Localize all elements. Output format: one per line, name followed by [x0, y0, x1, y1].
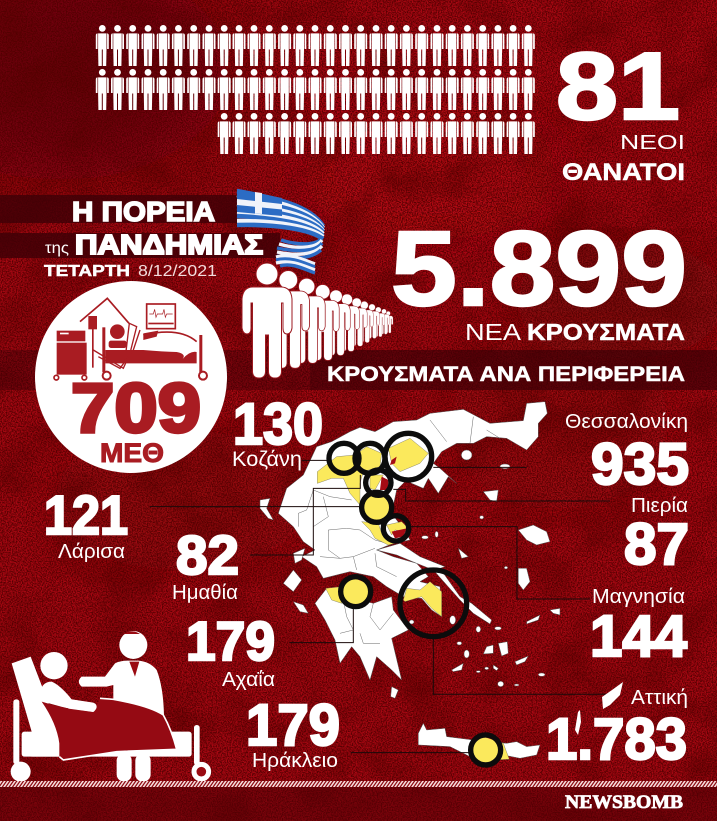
- figure: Thessaloniki: 935: [591, 432, 689, 497]
- regional borders: [298, 417, 500, 643]
- figure: Attica: Αττική: [631, 687, 688, 709]
- figure: Magnisia: Μαγνησία: [592, 586, 685, 608]
- 709 ICU number: 709: [71, 369, 201, 447]
- figure: Thessaloniki: Θεσσαλονίκη: [565, 411, 688, 433]
- ICU badge: [35, 281, 227, 473]
- figure: Kozani: Κοζάνη: [232, 448, 302, 471]
- figure: Imathia: Ημαθία: [172, 582, 238, 604]
- figure: Achaia: 179: [186, 610, 275, 672]
- figure: Larisa: 121: [44, 484, 128, 546]
- figure: Heraklion: Ηράκλειο: [252, 750, 338, 772]
- figure: Larisa: Λάρισα: [58, 541, 125, 563]
- cases counter: 5.899: [391, 210, 687, 328]
- figure: Attica: 1.783: [546, 707, 687, 772]
- icon: ICU bed and equipment: [54, 298, 207, 380]
- icon: doctor and patient in bed: [11, 631, 209, 782]
- figure: Pieria: 87: [624, 512, 689, 577]
- figure: Heraklion: 179: [246, 693, 340, 758]
- mainland: [260, 402, 560, 760]
- cases counter: ΚΡΟΥΣΜΑΤΑ: [527, 319, 685, 345]
- highlight rings: [329, 433, 501, 765]
- deaths counter: 81: [556, 33, 680, 140]
- hatched divider: [0, 781, 717, 787]
- deaths counter: [556, 33, 685, 186]
- highlighted yellow regions: [317, 438, 509, 763]
- figure: Magnisia: 144: [590, 604, 687, 669]
- red gulf details: [355, 457, 493, 740]
- heading: the course of the pandemic: 8/12/2021: [138, 263, 217, 280]
- heading: the course of the pandemic: ΤΕΤΑΡΤΗ: [44, 263, 130, 280]
- icon: Dodecanese islands: [575, 682, 623, 735]
- logo: Newsbomb: NEWSBOMB: [565, 792, 683, 813]
- heading: the course of the pandemic: ΠΑΝΔΗΜΙΑΣ: [75, 229, 263, 260]
- deaths counter: ΘΑΝΑΤΟΙ: [562, 159, 685, 186]
- icon: queue of people: [242, 263, 393, 378]
- figure: Pieria: Πιερία: [631, 495, 688, 517]
- deaths counter: ΝΕΟΙ: [620, 132, 685, 154]
- dark header bands: [0, 195, 717, 390]
- figure: Achaia: Αχαΐα: [222, 669, 275, 691]
- heading: the course of the pandemic: της: [45, 240, 69, 257]
- icon grid: 81 deaths pictogram: [96, 25, 535, 154]
- heading: the course of the pandemic: [44, 196, 263, 280]
- heading: the course of the pandemic: Η ΠΟΡΕΙΑ: [72, 196, 215, 227]
- icon: Greek flag ribbon: [237, 189, 323, 273]
- cases counter: ΝΕΑ: [465, 319, 522, 345]
- map of Greece with regions: [150, 402, 620, 765]
- ICU label: ΜΕΘ: [100, 438, 164, 468]
- figure: Thessaloniki: [565, 411, 689, 497]
- leader lines: [150, 460, 620, 753]
- figure: Imathia: 82: [176, 524, 239, 586]
- band title: cases per region: ΚΡΟΥΣΜΑΤΑ ΑΝΑ ΠΕΡΙΦΕΡΕΙΑ: [327, 363, 685, 386]
- figure: Kozani: 130: [233, 392, 323, 457]
